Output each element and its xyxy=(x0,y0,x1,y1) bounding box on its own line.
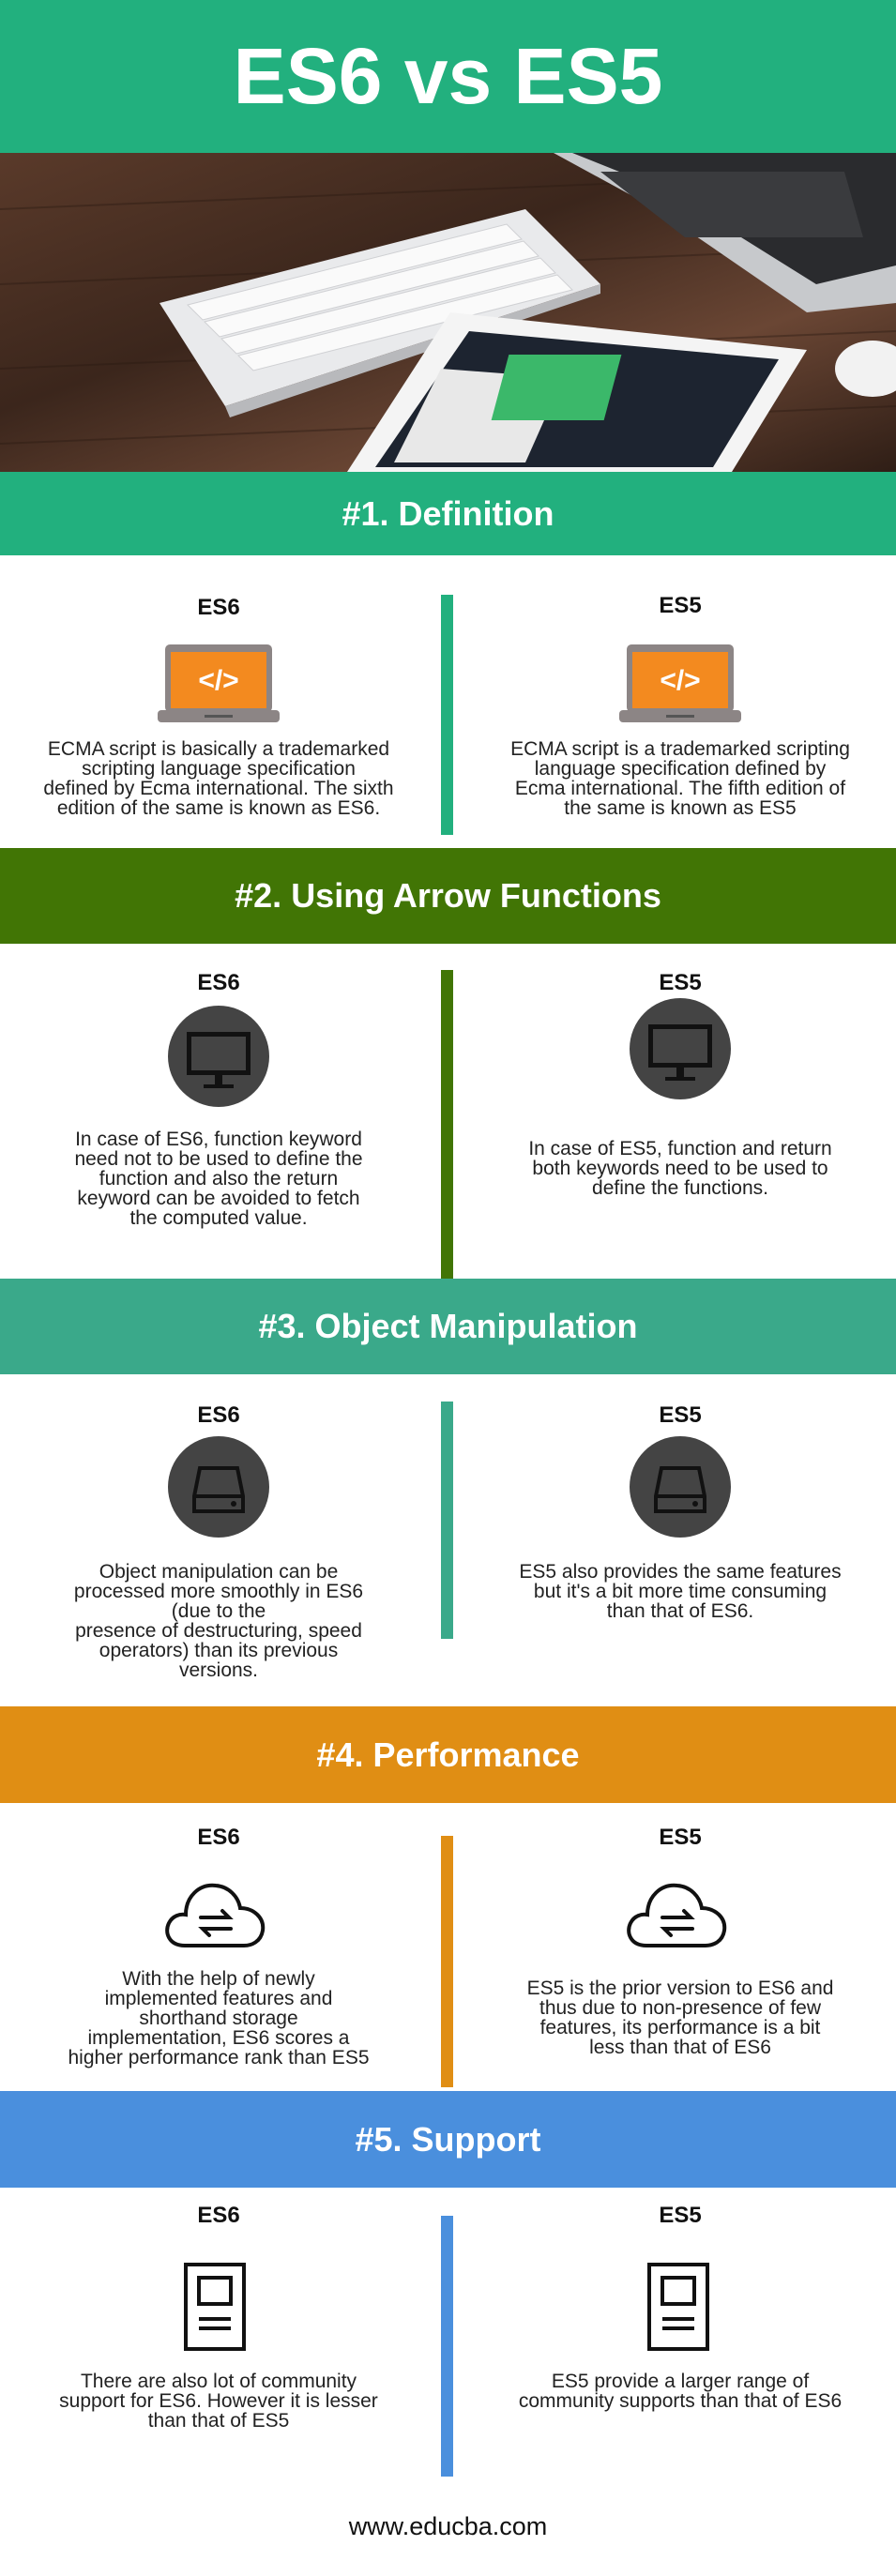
panel: object manipulation xyxy=(74,1402,842,1681)
ES6 text xyxy=(43,738,394,819)
icon: laptop code xyxy=(619,644,741,722)
ES5 text: the same is known as ES5 xyxy=(564,797,797,819)
icon: monitor xyxy=(630,998,731,1099)
ES5 text xyxy=(527,1977,833,2058)
photo: desk with keyboard, laptop and tablet xyxy=(0,153,896,472)
footer: website: www.educba.com xyxy=(349,2512,547,2540)
ES6 label: ES6 xyxy=(197,1402,240,1428)
icon: document xyxy=(184,2263,246,2351)
icon: laptop code: </> xyxy=(198,665,239,696)
header: #2 Using Arrow Functions xyxy=(0,848,896,944)
ES6 text: the computed value. xyxy=(129,1207,308,1229)
ES6 text: higher performance rank than ES5 xyxy=(68,2047,370,2068)
ES5 text: than that of ES6. xyxy=(607,1600,753,1622)
ES5 text: ECMA script is a trademarked scripting xyxy=(510,738,850,760)
ES5 text: ES5 provide a larger range of xyxy=(552,2371,809,2392)
ES6 text: ECMA script is basically a trademarked xyxy=(48,738,389,760)
icon: document xyxy=(647,2263,709,2351)
ES6 text: With the help of newly xyxy=(122,1968,315,1990)
ES6 text: edition of the same is known as ES6. xyxy=(57,797,380,819)
icon: hard drive xyxy=(168,1436,269,1538)
ES5 text xyxy=(519,2371,842,2412)
ES6 text: shorthand storage xyxy=(139,2008,298,2029)
ES5 text: community supports than that of ES6 xyxy=(519,2390,842,2412)
ES6 text: function and also the return xyxy=(99,1168,338,1190)
header: #1 Definition: #1. Definition xyxy=(342,494,554,533)
ES6 label: ES6 xyxy=(197,2203,240,2228)
ES6 text: operators) than its previous xyxy=(99,1640,338,1661)
ES6 text: defined by Ecma international. The sixth xyxy=(43,778,394,799)
header: #1 Definition xyxy=(0,472,896,555)
ES6 text: implementation, ES6 scores a xyxy=(88,2027,349,2049)
icon: cloud sync xyxy=(165,1884,265,1947)
icon: cloud sync xyxy=(627,1884,726,1947)
icon: laptop code: </> xyxy=(660,665,701,696)
header: #5 Support: #5. Support xyxy=(355,2120,541,2159)
divider xyxy=(441,970,453,1279)
ES6 text xyxy=(68,1968,370,2068)
ES6 text: presence of destructuring, speed xyxy=(75,1620,362,1642)
ES6 text: In case of ES6, function keyword xyxy=(75,1129,362,1150)
header: #5 Support xyxy=(0,2091,896,2188)
icon: laptop code xyxy=(158,644,280,722)
ES6 text: support for ES6. However it is lesser xyxy=(59,2390,378,2412)
ES5 text: less than that of ES6 xyxy=(589,2037,771,2058)
divider xyxy=(441,595,453,835)
header: #2 Using Arrow Functions: #2. Using Arrow Functions xyxy=(235,876,661,915)
ES6 text: scripting language specification xyxy=(82,758,356,780)
header: #4 Performance xyxy=(0,1706,896,1803)
ES5 text: both keywords need to be used to xyxy=(532,1158,828,1179)
header: #4 Performance: #4. Performance xyxy=(316,1735,580,1774)
ES5 text: language specification defined by xyxy=(535,758,826,780)
ES5 text: but it's a bit more time consuming xyxy=(534,1581,827,1602)
ES5 label: ES5 xyxy=(659,2203,702,2228)
ES6 text: There are also lot of community xyxy=(81,2371,357,2392)
ES6 text: than that of ES5 xyxy=(148,2410,289,2432)
ES6 text xyxy=(74,1561,363,1681)
ES5 label: ES5 xyxy=(659,1825,702,1850)
ES5 text: define the functions. xyxy=(592,1177,768,1199)
title band xyxy=(0,0,896,153)
panel: performance xyxy=(68,1825,833,2087)
ES5 label: ES5 xyxy=(659,1402,702,1428)
icon: hard drive xyxy=(630,1436,731,1538)
header: #3 Object Manipulation: #3. Object Manipulation xyxy=(258,1307,638,1345)
ES6 text: need not to be used to define the xyxy=(74,1148,363,1170)
ES5 label: ES5 xyxy=(659,593,702,618)
title band: ES6 vs ES5 xyxy=(234,32,662,120)
divider xyxy=(441,1836,453,2087)
ES5 text: Ecma international. The fifth edition of xyxy=(515,778,845,799)
ES5 text: thus due to non-presence of few xyxy=(539,1997,821,2019)
ES6 text: processed more smoothly in ES6 xyxy=(74,1581,363,1602)
ES6 text: versions. xyxy=(179,1659,258,1681)
header: #3 Object Manipulation xyxy=(0,1279,896,1374)
ES5 text: features, its performance is a bit xyxy=(540,2017,820,2038)
ES6 text xyxy=(59,2371,378,2432)
ES6 label: ES6 xyxy=(197,970,240,995)
ES5 text xyxy=(528,1138,832,1199)
ES5 text xyxy=(510,738,850,819)
ES5 text xyxy=(519,1561,842,1622)
ES6 text: Object manipulation can be xyxy=(99,1561,338,1583)
ES5 text: ES5 also provides the same features xyxy=(519,1561,842,1583)
ES6 text: (due to the xyxy=(172,1600,266,1622)
ES6 text: keyword can be avoided to fetch xyxy=(77,1188,360,1209)
icon: monitor xyxy=(168,1006,269,1107)
ES6 text: implemented features and xyxy=(105,1988,332,2009)
ES5 text: In case of ES5, function and return xyxy=(528,1138,832,1159)
ES5 text: ES5 is the prior version to ES6 and xyxy=(527,1977,833,1999)
ES5 label: ES5 xyxy=(659,970,702,995)
panel: arrow functions xyxy=(74,970,832,1279)
panel: definition xyxy=(43,593,850,835)
divider xyxy=(441,2216,453,2477)
ES6 label: ES6 xyxy=(197,1825,240,1850)
ES6 text xyxy=(74,1129,363,1229)
panel: support xyxy=(59,2203,842,2477)
ES6 label: ES6 xyxy=(197,595,240,620)
divider xyxy=(441,1402,453,1639)
